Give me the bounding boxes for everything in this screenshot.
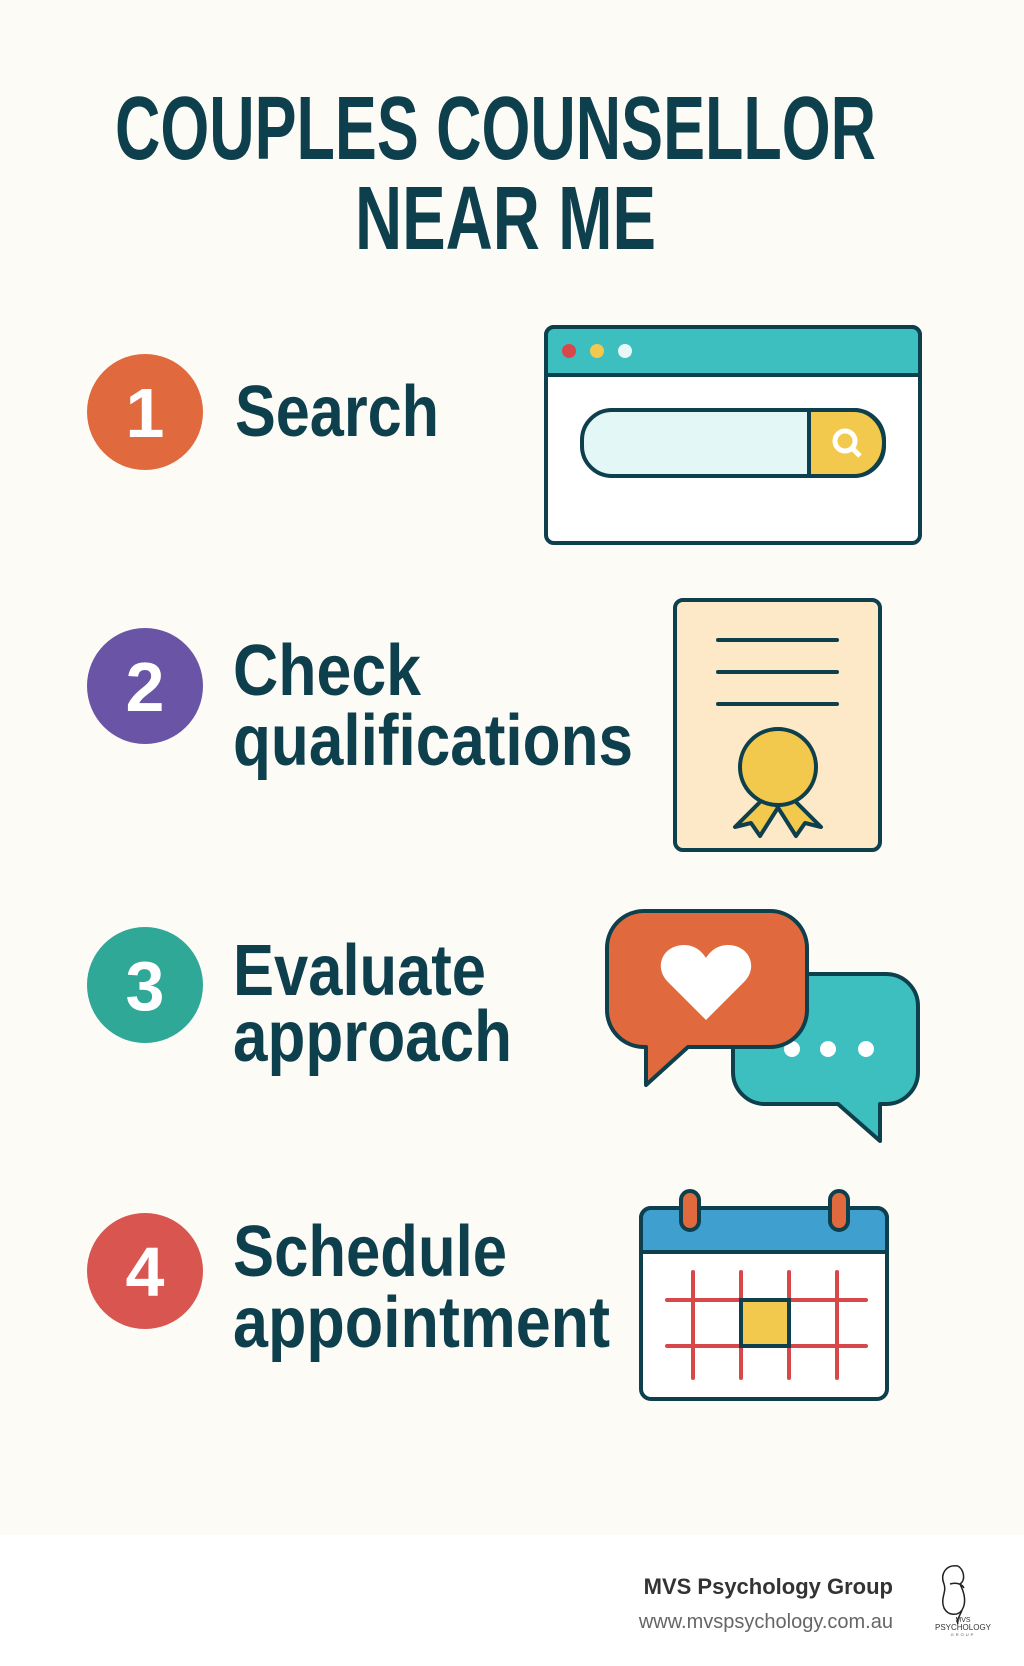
step 4: schedule appointment: Schedule — [233, 1212, 507, 1292]
step 1: search — [87, 354, 439, 470]
title: NEAR ME — [355, 169, 656, 269]
step 4: schedule appointment — [87, 1212, 610, 1363]
step 2: check qualifications: Check — [233, 631, 422, 711]
logo: MVS — [955, 1617, 971, 1624]
logo — [935, 1566, 992, 1637]
logo: GROUP — [951, 1632, 975, 1637]
step 3: evaluate approach: 3 — [126, 947, 164, 1025]
step 2: check qualifications: 2 — [126, 648, 164, 726]
step 4: schedule appointment: appointment — [233, 1283, 610, 1363]
step 2: check qualifications: qualifications — [233, 701, 633, 781]
footer: company name and url: www.mvspsychology.com.au — [638, 1611, 893, 1633]
step 2: check qualifications — [87, 628, 633, 781]
step 3: evaluate approach: approach — [233, 997, 512, 1077]
title — [115, 79, 876, 269]
step 1: search: Search — [235, 372, 439, 452]
step 3: evaluate approach — [87, 927, 512, 1077]
icon: browser search — [546, 327, 920, 543]
step 3: evaluate approach: Evaluate — [233, 931, 486, 1011]
icon: chat bubbles — [607, 911, 918, 1141]
step 4: schedule appointment: 4 — [126, 1233, 165, 1311]
logo: PSYCHOLOGY — [935, 1623, 992, 1632]
footer: company name and url: MVS Psychology Group — [644, 1574, 893, 1599]
step 1: search: 1 — [126, 374, 164, 452]
footer: company name and url — [638, 1574, 893, 1633]
icon: certificate — [675, 600, 880, 850]
icon: calendar — [641, 1191, 887, 1399]
